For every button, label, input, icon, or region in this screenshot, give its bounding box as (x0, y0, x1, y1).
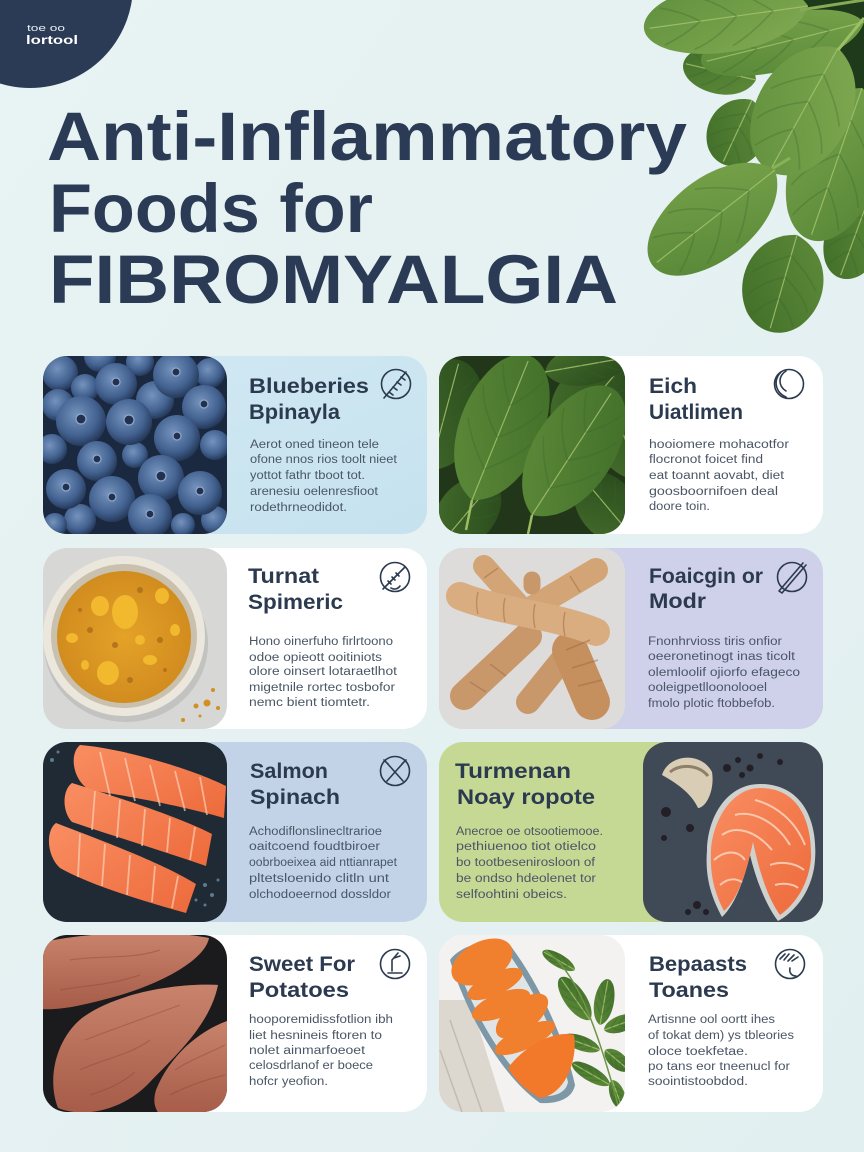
panel: ginger (439, 548, 823, 729)
text block: Aerot oned tineon tele (250, 439, 379, 451)
panel: blueberries (43, 356, 427, 534)
text block: soointistoobdod. (648, 1076, 748, 1088)
text block (648, 1014, 794, 1088)
text block: hofcr yeofion. (249, 1076, 328, 1088)
spinach leaves decoration (628, 0, 864, 343)
text block: hooiomere mohacotfor (649, 439, 789, 451)
heading (248, 565, 343, 614)
heading: Potatoes (249, 979, 349, 1002)
text block (649, 439, 789, 513)
heading: Blueberies (249, 375, 369, 398)
text block: olchodoeernod dossldor (249, 889, 391, 901)
heading (249, 375, 369, 424)
text block: arenesiu oelenresfioot (250, 486, 379, 498)
text block: Anecroe oe otsootiemooe. (456, 826, 603, 838)
text block: pethiuenoo tiot otielco (456, 841, 596, 853)
photo: sweet potato dish with herbs (439, 935, 625, 1112)
logo badge: toe oo (27, 23, 65, 33)
text block: yottot fathr tboot tot. (250, 470, 365, 482)
heading: Bepaasts (649, 953, 747, 976)
icon: moon circle (774, 370, 804, 398)
text block: eat toannt aovabt, diet (649, 470, 785, 482)
text block (249, 636, 398, 709)
text block: selfoohtini obeics. (456, 889, 567, 901)
heading: Noay ropote (457, 786, 595, 809)
logo badge: lortool (26, 33, 78, 47)
heading: Eich (649, 375, 697, 398)
text block: bo tootbesenirosloon of (456, 857, 596, 869)
text block: ooleigpetlloonolooel (648, 682, 767, 694)
text block: po tans eor tneenucl for (648, 1061, 790, 1073)
heading: Sweet For (249, 953, 355, 976)
text block: fmolo plotic ftobbefob. (648, 698, 775, 710)
text block: oobrboeixea aid nttianrapet (249, 857, 398, 869)
photo: ginger root (439, 548, 625, 729)
photo: blueberries (43, 356, 227, 534)
heading: Uiatlimen (649, 401, 743, 424)
photo: salmon steak (643, 742, 823, 922)
photo: turmeric bowl (43, 548, 227, 729)
text block: ofone nnos rios toolt nieet (250, 454, 398, 466)
text block: Artisnne ool oortt ihes (648, 1014, 775, 1026)
text block (249, 826, 398, 901)
text block: olore oinsert lotaraetlhot (249, 666, 398, 678)
panel: spinach greens (439, 356, 823, 534)
heading (249, 953, 355, 1002)
panel: salmon (43, 742, 427, 922)
heading: Modr (649, 590, 706, 613)
heading: Turnat (248, 565, 319, 588)
text block (648, 636, 800, 710)
text block (249, 1014, 393, 1088)
text block: goosboornifoen deal (649, 486, 778, 498)
icon: crossed pen (778, 562, 806, 593)
icon: wave hand (776, 950, 804, 978)
text block: of tokat dem) ys tbleories (648, 1030, 794, 1042)
text block: oaitcoend foudtbiroer (249, 841, 380, 853)
text block: odoe opieott ooitiniots (249, 652, 382, 664)
panel: green card (439, 742, 823, 922)
photo: salmon fillets (43, 742, 227, 922)
heading (649, 953, 747, 1002)
text block: flocronot foicet find (649, 454, 763, 466)
panel: turmeric (43, 548, 427, 729)
icon: crossed tools (380, 756, 410, 786)
heading: Turmenan (455, 760, 571, 783)
logo badge (0, 0, 133, 88)
icon: sprout (380, 950, 410, 978)
heading (649, 375, 743, 424)
heading (649, 565, 763, 613)
text block: hooporemidissfotlion ibh (249, 1014, 393, 1026)
icon: crossed spoon dots (380, 562, 410, 592)
text block (456, 826, 603, 901)
heading: Foaicgin or (649, 565, 763, 588)
text block: nemc bient tiomtetr. (249, 697, 370, 709)
heading: Salmon (250, 760, 328, 783)
text block: migetnile rortec tosbofor (249, 682, 395, 694)
text block: nolet ainmarfoeoet (249, 1045, 366, 1057)
heading: Spimeric (248, 591, 343, 614)
text block: doore toin. (649, 501, 710, 513)
title (47, 98, 687, 318)
panel: sweet potato dish (439, 929, 823, 1112)
photo: spinach (439, 356, 625, 534)
title: Anti-Inflammatory (47, 98, 687, 175)
text block: liet hesnineis ftoren to (249, 1030, 382, 1042)
text block: be ondso hdeolenet tor (456, 873, 596, 885)
text block: pltetsloenido clitln unt (249, 873, 390, 885)
title: FIBROMYALGIA (49, 241, 618, 318)
text block: oloce toekfetae. (648, 1046, 748, 1058)
photo: sweet potatoes (43, 935, 227, 1112)
heading (455, 760, 595, 809)
text block (250, 439, 398, 514)
panel: sweet potatoes (30, 933, 427, 1115)
heading (250, 760, 340, 809)
text block: olemloolif ojiorfo efageco (648, 667, 800, 679)
text block: Hono oinerfuho firlrtoono (249, 636, 393, 648)
text block: Achodiflonslinecltrarioe (249, 826, 382, 838)
heading: Bpinayla (249, 401, 340, 424)
text block: celosdrlanof er boece (249, 1060, 373, 1072)
text block: Fnonhrvioss tiris onfior (648, 636, 782, 648)
title: Foods for (49, 170, 373, 247)
text block: rodethrneodidot. (250, 502, 347, 514)
heading: Toanes (649, 979, 729, 1002)
text block: oeeronetinogt inas ticolt (648, 651, 796, 663)
icon: crossed spoon (382, 370, 410, 398)
heading: Spinach (250, 786, 340, 809)
